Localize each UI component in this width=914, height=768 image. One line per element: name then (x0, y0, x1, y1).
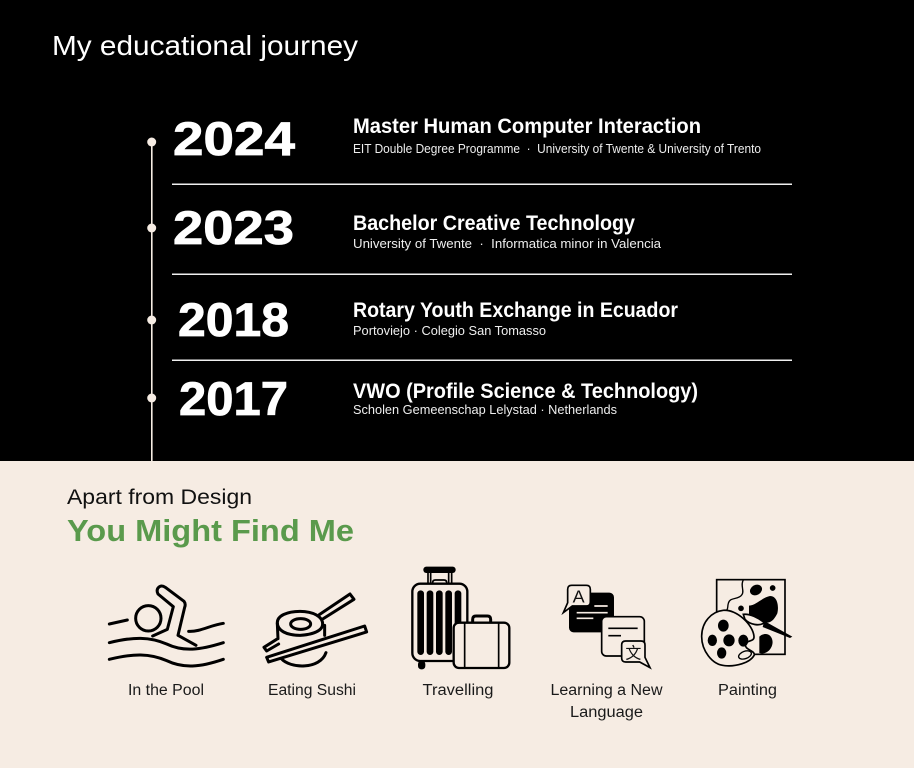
entry: 2023 (173, 201, 661, 254)
icon: language translation (563, 585, 650, 668)
icon: painting palette (702, 580, 792, 666)
entry: 2017 (179, 372, 698, 425)
title: My educational journey (52, 30, 358, 61)
heading: you might find me: You Might Find Me (67, 513, 354, 548)
entry: 2017: Scholen Gemeenschap Lelystad · Netherlands (353, 403, 617, 417)
heading: apart from design: Apart from Design (67, 486, 252, 509)
entry: 2023: 2023 (173, 201, 294, 254)
entry: 2018 (178, 293, 678, 346)
icon: language translation: 文 (625, 640, 641, 664)
label: eating sushi: Eating Sushi (268, 682, 356, 699)
label: learning a new language (550, 682, 663, 721)
timeline (147, 138, 156, 461)
entry: 2024: EIT Double Degree Programme · University of Twente & University of Trento (353, 142, 761, 156)
entry: 2017: VWO (Profile Science & Technology) (353, 380, 698, 403)
entry: 2018: Rotary Youth Exchange in Ecuador (353, 299, 678, 322)
entry: 2024: 2024 (173, 112, 295, 165)
entry: 2018: Portoviejo · Colegio San Tomasso (353, 324, 546, 338)
entry: 2024 (173, 112, 761, 165)
panel: education background (0, 0, 914, 461)
entry: 2023: University of Twente · Informatica minor in Valencia (353, 237, 661, 251)
panel: hobbies background (0, 461, 914, 768)
entry: 2018: 2018 (178, 293, 289, 346)
entry: 2024: Master Human Computer Interaction (353, 115, 701, 138)
label: travelling: Travelling (422, 682, 494, 699)
label: in the pool: In the Pool (128, 682, 204, 699)
icon: language translation: A (573, 587, 585, 607)
entry: 2023: Bachelor Creative Technology (353, 212, 635, 235)
icon: luggage (412, 567, 509, 669)
entry: 2017: 2017 (179, 372, 288, 425)
icon: sushi and chopsticks (264, 594, 367, 666)
label: learning a new language: Language (570, 704, 643, 721)
label: learning a new language: Learning a New (550, 682, 663, 699)
icon: swimmer (109, 586, 223, 666)
label: painting: Painting (718, 682, 777, 699)
